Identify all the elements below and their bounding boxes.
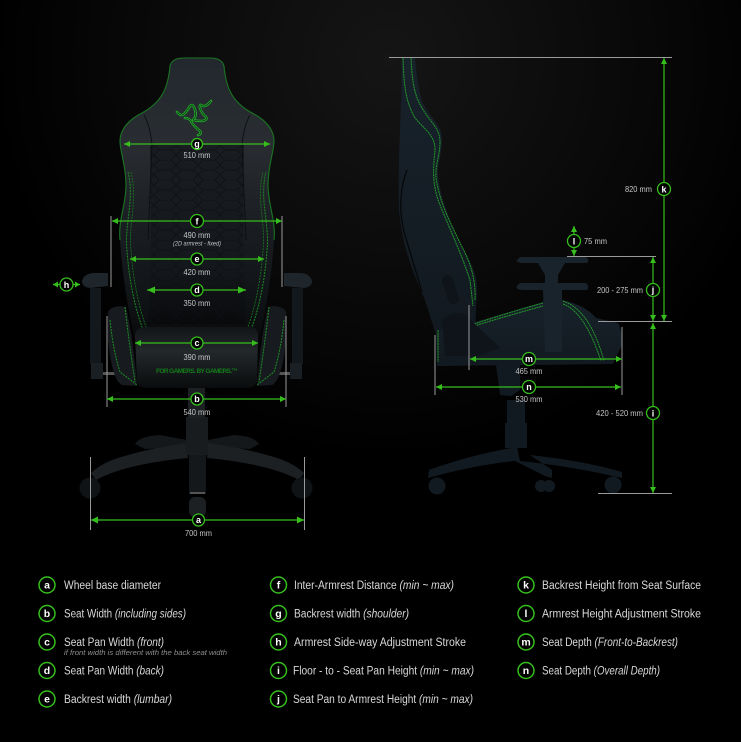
badge letters: g [194, 139, 200, 149]
dimension lines [53, 58, 664, 520]
legend letters: m [521, 636, 531, 648]
dimension values: 200 - 275 mm [597, 285, 643, 295]
backrest [120, 58, 274, 345]
badge letters: c [194, 338, 200, 348]
legend labels: Seat Pan to Armrest Height (min ~ max) [293, 694, 473, 706]
badge letters: j [651, 285, 654, 295]
dimension values: 465 mm [516, 366, 542, 376]
legend labels [64, 580, 701, 706]
badge letters [64, 139, 667, 525]
dimension values: 700 mm [185, 528, 212, 538]
legend labels: Armrest Height Adjustment Stroke [542, 608, 701, 620]
dimension values: 420 - 520 mm [596, 408, 643, 418]
seat bolsters [108, 306, 286, 386]
side seat [436, 274, 622, 366]
front view chair [80, 58, 312, 517]
legend letters: h [275, 636, 282, 648]
seat cushion [135, 327, 258, 388]
badge letters: m [525, 354, 533, 364]
side backrest [399, 58, 477, 338]
legend labels: Seat Depth (Overall Depth) [542, 666, 660, 678]
legend letters: j [276, 694, 280, 706]
badge letters: i [652, 408, 654, 418]
legend labels: Armrest Side-way Adjustment Stroke [294, 637, 466, 649]
legend circles [39, 577, 534, 707]
dimension values: 540 mm [184, 407, 210, 417]
legend letters: b [44, 608, 50, 620]
legend letters: f [277, 580, 281, 592]
badge letters: b [194, 394, 200, 404]
dimension values: 510 mm [184, 150, 210, 160]
dimension values: 530 mm [516, 394, 542, 404]
legend letters: a [44, 580, 50, 592]
gray reference lines [90, 58, 672, 530]
chair base [80, 388, 312, 517]
legend labels: Seat Pan Width (front) [64, 637, 164, 649]
legend labels: Seat Width (including sides) [64, 608, 186, 620]
legend letters: n [523, 665, 529, 677]
dimension arrowheads [53, 58, 667, 524]
legend labels: Seat Depth (Front-to-Backrest) [542, 637, 678, 649]
dimension values [173, 150, 652, 538]
badge letters: h [64, 280, 69, 290]
legend letters: g [275, 608, 282, 620]
badge letters: n [526, 382, 532, 392]
badge letters: a [196, 515, 202, 525]
Razer logo [177, 101, 211, 135]
legend [39, 577, 701, 707]
legend labels: Inter-Armrest Distance (min ~ max) [294, 580, 454, 592]
badge letters: l [573, 236, 575, 246]
dimension values: 420 mm [184, 267, 210, 277]
badge letters: f [196, 216, 200, 226]
legend letters: d [44, 665, 50, 677]
left armrest [82, 273, 121, 379]
legend letters: e [44, 694, 50, 706]
seat slogan: FOR GAMERS. BY GAMERS.™ [156, 368, 238, 375]
legend labels: Floor - to - Seat Pan Height (min ~ max) [293, 666, 474, 678]
dimension values: (2D armrest - fixed) [173, 242, 221, 248]
legend letters: i [277, 665, 280, 677]
side base [428, 365, 622, 494]
badge letters: k [661, 184, 667, 194]
side view chair [399, 58, 622, 494]
right armrest [272, 273, 312, 379]
legend letters: c [44, 636, 50, 648]
dimension values: 490 mm [184, 230, 210, 240]
legend letters [44, 580, 531, 706]
side armrest [517, 257, 588, 352]
badge letters: e [194, 254, 200, 264]
dimension values: 350 mm [184, 298, 210, 308]
legend labels: Wheel base diameter [64, 580, 161, 592]
legend letters: k [523, 580, 529, 592]
dimension values: 75 mm [584, 236, 607, 246]
legend letters: l [525, 608, 528, 620]
dimension badges [60, 138, 670, 526]
legend labels: Backrest width (shoulder) [294, 608, 409, 620]
badge letters: d [194, 285, 200, 295]
dimension values: 390 mm [184, 352, 210, 362]
dimension values: 820 mm [625, 184, 652, 194]
legend labels: Backrest Height from Seat Surface [542, 580, 701, 592]
legend labels: Backrest width (lumbar) [64, 694, 172, 706]
legend labels: if front width is different with the back seat width [64, 648, 227, 657]
legend labels: Seat Pan Width (back) [64, 666, 164, 678]
